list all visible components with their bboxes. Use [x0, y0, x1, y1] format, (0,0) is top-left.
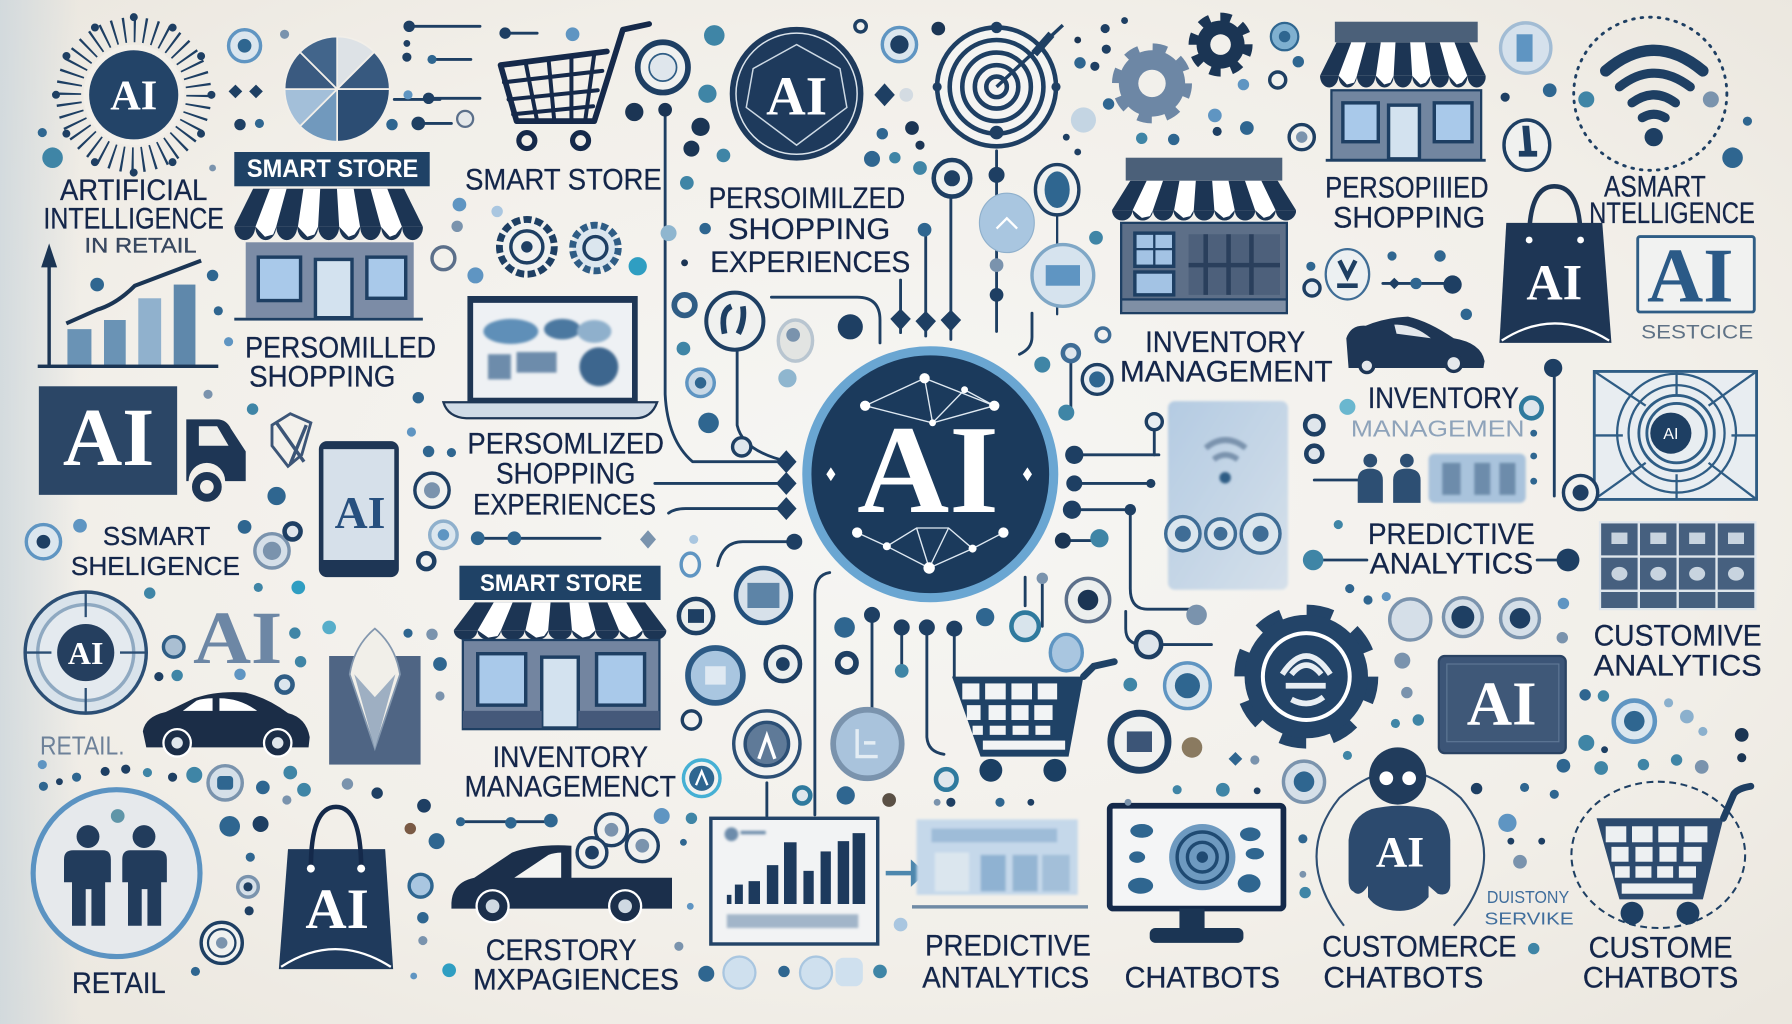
label: customer experiences: CERSTORY: [486, 934, 637, 967]
icon: AI shopping bag top right: [1499, 186, 1611, 343]
label: customive analytics: ANALYTICS: [1594, 649, 1762, 682]
store: smart store left: [234, 152, 430, 321]
store: smart store left: SMART STORE: [247, 155, 418, 183]
icon: grey gear: [1117, 48, 1187, 119]
label: personalized shopping experiences middle: SHOPPING: [496, 457, 635, 490]
label: predictive analytics bottom: PREDICTIVE: [925, 929, 1091, 962]
label: inventory management bottom: INVENTORY: [493, 741, 648, 774]
icon: AI shopping bag bottom: AI: [305, 878, 369, 941]
icon: AI circle top: AI: [766, 65, 827, 126]
icon: pickup truck: [451, 814, 672, 922]
label: predictive analytics right: [1368, 518, 1535, 581]
icon: target with dart: [933, 22, 1063, 146]
label: customer service: DUISTONY: [1487, 887, 1570, 907]
label: artificial intelligence in retail: INTELLIGENCE: [43, 203, 224, 236]
label: smart store: SMART STORE: [465, 164, 662, 197]
label: personalized shopping right: SHOPPING: [1333, 201, 1485, 234]
icon: dark gear: [1194, 18, 1247, 71]
grey AI letters: AI: [193, 597, 282, 680]
AI ring left: [25, 592, 146, 713]
icon: AI sunburst: [56, 17, 211, 173]
label: customer service: [1485, 887, 1574, 929]
label: personalized shopping experiences middle: PERSOMLIZED: [467, 428, 664, 461]
store: top right: [1320, 22, 1486, 162]
label: predictive analytics bottom: [922, 929, 1091, 994]
pie chart: [285, 37, 390, 142]
label: customive analytics: CUSTOMIVE: [1594, 620, 1762, 653]
icon: AI robot: [1317, 747, 1484, 926]
icon: center shopping cart: [952, 662, 1114, 782]
hub AI text: AI: [857, 401, 999, 540]
radar panel: [1594, 371, 1757, 499]
AI button: [1439, 656, 1566, 753]
label: personalized shopping experiences top: SHOPPING: [728, 213, 890, 246]
label: retail faded: RETAIL.: [40, 730, 125, 760]
icon: truck: [186, 419, 246, 503]
icon: smartphone: [319, 441, 399, 577]
dashboard bar chart: [711, 818, 878, 944]
label: customerce chatbots: [1322, 931, 1517, 994]
label: customer chatbots right: CUSTOME: [1589, 932, 1733, 965]
store: smart store center: SMART STORE: [480, 570, 642, 597]
label: retail: RETAIL: [72, 967, 166, 1000]
blue inventory panel: [1166, 401, 1288, 590]
label: personalized shopping experiences top: EXPERIENCES: [710, 246, 910, 279]
radar panel: AI: [1663, 426, 1678, 443]
icon: wifi: [1574, 17, 1727, 170]
label: artificial intelligence in retail: ARTIFICIAL: [60, 174, 207, 207]
label: customerce chatbots: CHATBOTS: [1323, 961, 1483, 994]
label: personalized shopping right: [1325, 172, 1489, 234]
label: personalized shopping experiences middle: EXPERIENCES: [473, 488, 656, 521]
icon: sport car: [1346, 317, 1485, 373]
label: service: SESTCICE: [1641, 321, 1753, 343]
label: inventory management center right: MANAGEMENT: [1120, 356, 1333, 389]
label: personalized shopping right: PERSOPIIIED: [1325, 172, 1489, 205]
icon: sedan car: [143, 692, 310, 757]
central AI hub: [807, 351, 1054, 598]
label: inventory management center right: INVENTORY: [1145, 326, 1305, 359]
label: asmart intelligence: [1589, 171, 1755, 230]
icon: smartphone: AI: [335, 487, 385, 538]
label: smart intelligence left: [71, 521, 240, 581]
icon: chatbot monitor: [1110, 806, 1283, 943]
label: artificial intelligence in retail: [43, 174, 224, 258]
hub network top: [860, 373, 999, 426]
label: artificial intelligence in retail: IN RETAIL: [85, 233, 197, 258]
label: chatbots: CHATBOTS: [1125, 961, 1280, 994]
icon: large gear: [1241, 611, 1371, 742]
hub network bottom: [826, 467, 1032, 574]
label: personalized shopping 1: SHOPPING: [249, 360, 395, 393]
icon grid: [1600, 522, 1755, 609]
AI box with truck: AI: [63, 392, 154, 483]
label: personalized shopping experiences top: PERSOIMILZED: [709, 182, 905, 215]
store: center right: [1112, 158, 1296, 313]
label: inventory management faded: MANAGEMEN: [1351, 416, 1525, 442]
label: asmart intelligence: NTELLIGENCE: [1589, 197, 1755, 230]
label: predictive analytics bottom: ANTALYTICS: [922, 961, 1089, 994]
icon: top shopping cart: [501, 24, 649, 149]
AI ring left: AI: [68, 635, 103, 671]
label: smart intelligence left: SSMART: [103, 521, 210, 551]
label: inventory management center right: [1120, 326, 1333, 389]
label: customer experiences: [473, 934, 679, 997]
label: inventory management bottom: [465, 741, 676, 804]
label: predictive analytics right: PREDICTIVE: [1368, 518, 1535, 551]
icon: AI shopping bag bottom: [279, 807, 393, 969]
label: inventory management faded: INVENTORY: [1368, 382, 1519, 415]
blurred dashboard: [912, 819, 1088, 909]
icon: AI circle top: [731, 29, 862, 159]
label: asmart intelligence: ASMART: [1604, 171, 1706, 204]
label: personalized shopping 1: PERSOMILLED: [245, 332, 436, 365]
label: customer service: SERVIKE: [1485, 909, 1574, 929]
label: customer chatbots right: [1583, 932, 1738, 994]
store: smart store center: [454, 566, 667, 729]
label: personalized shopping 1: [245, 332, 436, 393]
label: customive analytics: [1594, 620, 1762, 682]
AI box with truck: [39, 386, 246, 503]
icon: lower right cart: [1571, 782, 1751, 928]
circuit lines: [394, 26, 1568, 822]
label: customer experiences: MXPAGIENCES: [473, 964, 679, 997]
icon: laptop: [443, 296, 657, 418]
label: personalized shopping experiences top: [709, 182, 910, 279]
icon: jacket bag: [329, 629, 421, 765]
label: inventory management bottom: MANAGEMENCT: [465, 771, 676, 804]
label: inventory management faded: [1351, 382, 1525, 442]
label: smart intelligence left: SHELIGENCE: [71, 551, 240, 581]
label: predictive analytics right: ANALYTICS: [1370, 548, 1533, 581]
growth bar chart: [38, 243, 218, 368]
label: customer chatbots right: CHATBOTS: [1583, 961, 1738, 994]
label: customerce chatbots: CUSTOMERCE: [1322, 931, 1517, 964]
people row with blurred tiles: [1358, 454, 1526, 503]
label: personalized shopping experiences middle: [467, 428, 664, 521]
icon: AI sunburst: AI: [110, 73, 157, 120]
arrow: [886, 859, 926, 887]
AI outlined box: AI: [1647, 233, 1733, 319]
icon: AI shopping bag top right: AI: [1526, 254, 1582, 310]
icon: AI robot: AI: [1376, 828, 1424, 876]
retail people circle: [33, 790, 200, 957]
AI button: AI: [1467, 669, 1537, 739]
icon: two people: [64, 825, 167, 926]
